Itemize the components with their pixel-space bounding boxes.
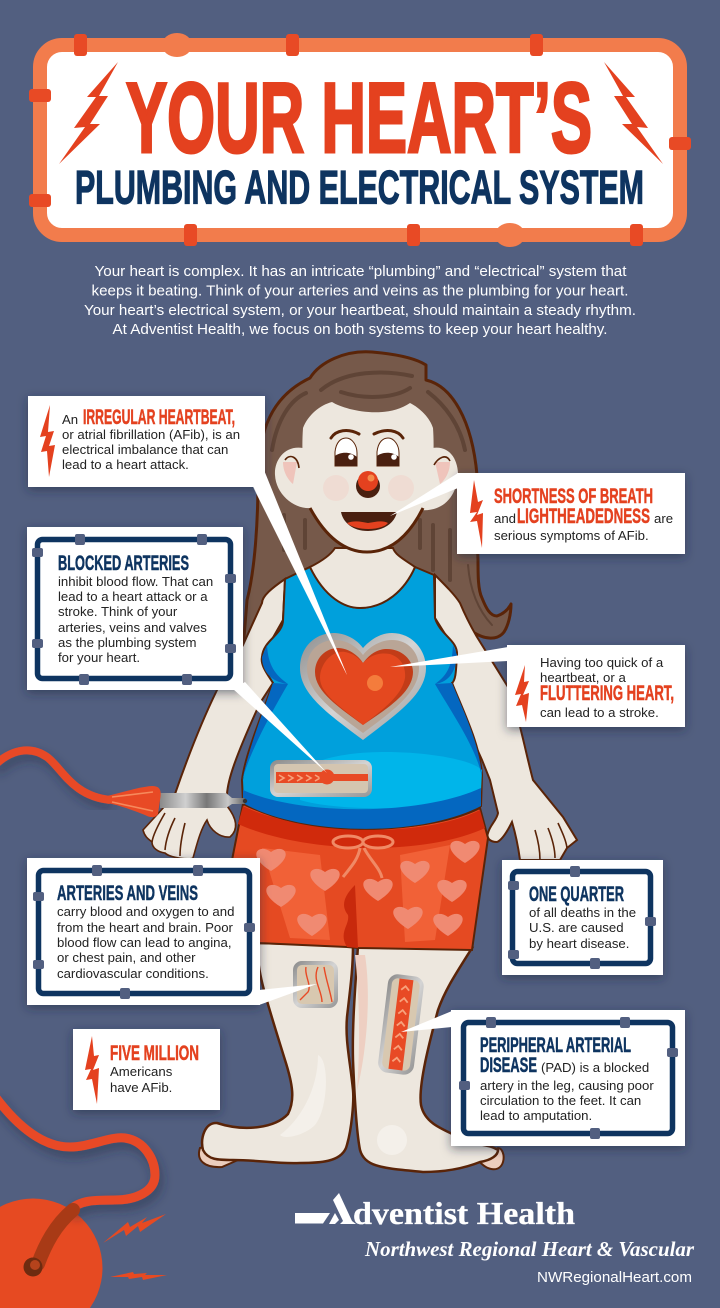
- text block: or atrial fibrillation (AFib), is an: [62, 427, 240, 442]
- panel: shortness of breath callout: [390, 473, 685, 554]
- text block: electrical imbalance that can: [62, 442, 228, 457]
- text block: IRREGULAR HEARTBEAT,: [83, 406, 235, 429]
- text block: are: [654, 511, 673, 526]
- drawstring bow: [333, 836, 393, 878]
- icon: bolt: [85, 1036, 99, 1104]
- icon: right lightning bolt: [604, 62, 663, 164]
- valves: [32, 534, 236, 685]
- face: [302, 402, 434, 552]
- text block: heartbeat, or a: [540, 670, 626, 685]
- text block: have AFib.: [110, 1080, 172, 1095]
- intro text: [84, 263, 636, 338]
- left arm and hand: [143, 579, 285, 859]
- figure: woman: [107, 352, 577, 1172]
- panel: five million callout: [73, 1029, 220, 1110]
- text block: BLOCKED ARTERIES: [58, 552, 189, 575]
- text block: PERIPHERAL ARTERIAL: [480, 1034, 631, 1057]
- hair: [243, 352, 511, 650]
- chest and neck: [310, 548, 415, 608]
- mouth: [341, 512, 397, 531]
- panel: fluttering heart callout: [390, 645, 685, 727]
- text block: DISEASE: [480, 1054, 537, 1077]
- text block: from the heart and brain. Poor: [57, 920, 234, 935]
- text block: [57, 882, 234, 981]
- text block: (PAD) is a blocked: [541, 1060, 649, 1075]
- text block: artery in the leg, causing poor: [480, 1078, 654, 1093]
- text block: Americans: [110, 1064, 173, 1079]
- shorts: [230, 804, 488, 950]
- panel: blocked arteries callout: [27, 527, 327, 773]
- text block: [110, 1042, 199, 1095]
- heart window: [300, 633, 426, 740]
- belly artery window: [272, 762, 370, 795]
- electric plug on wrist: [107, 786, 247, 817]
- footer text: NWRegionalHeart.com: [537, 1270, 692, 1286]
- icon: small bolts near socket: [103, 1214, 167, 1280]
- text block: stroke. Think of your: [58, 604, 178, 619]
- text block: cardiovascular conditions.: [57, 966, 209, 981]
- valves: [33, 865, 255, 999]
- hearts: [256, 841, 480, 936]
- text block: lead to a heart attack.: [62, 457, 189, 472]
- right arm and hand: [435, 575, 577, 860]
- text block: circulation to the feet. It can: [480, 1093, 641, 1108]
- icon: bolt: [470, 480, 483, 548]
- text block: FIVE MILLION: [110, 1042, 199, 1065]
- text block: for your heart.: [58, 650, 140, 665]
- icon: left lightning bolt: [59, 62, 118, 164]
- text block: ARTERIES AND VEINS: [57, 882, 198, 905]
- text block: blood flow can lead to angina,: [57, 935, 232, 950]
- text block: of all deaths in the: [529, 905, 636, 920]
- intro text: Your heart’s electrical system, or your heartbeat, should maintain a steady rhythm.: [84, 302, 636, 319]
- valves: [508, 866, 656, 969]
- text block: [480, 1034, 654, 1123]
- intro text: keeps it beating. Think of your arteries and veins as the plumbing for your heart.: [92, 282, 628, 300]
- text block: serious symptoms of AFib.: [494, 528, 649, 543]
- panel: peripheral arterial disease callout: [401, 1010, 685, 1146]
- ears: [275, 448, 458, 510]
- text block: can lead to a stroke.: [540, 705, 659, 720]
- clown nose: [356, 471, 380, 498]
- thigh window: [295, 963, 336, 1006]
- text block: arteries, veins and valves: [58, 620, 207, 635]
- text block: lead to amputation.: [480, 1108, 592, 1123]
- panel: one quarter callout: [502, 860, 663, 975]
- footer text: [364, 1237, 695, 1286]
- text block: ONE QUARTER: [529, 883, 624, 906]
- valves: [459, 1017, 678, 1139]
- text block: by heart disease.: [529, 936, 629, 951]
- lower electric cord and socket: [0, 1095, 155, 1308]
- icon: bolt: [515, 665, 529, 722]
- text block: lead to a heart attack or a: [58, 589, 208, 604]
- banner: pipe frame with title: [29, 33, 691, 247]
- text block: or chest pain, and other: [57, 950, 196, 965]
- panel: arteries and veins callout: [27, 858, 317, 1005]
- cheeks: [323, 475, 414, 501]
- text block: [494, 485, 673, 543]
- text block: LIGHTHEADEDNESS: [517, 505, 650, 528]
- text block: as the plumbing system: [58, 635, 197, 650]
- text block: inhibit blood flow. That can: [58, 574, 213, 589]
- intro text: At Adventist Health, we focus on both systems to keep your heart healthy.: [112, 321, 608, 338]
- legs and feet: [199, 943, 504, 1172]
- text block: [62, 406, 240, 472]
- text block: [529, 883, 636, 951]
- upper electric cord: [0, 750, 110, 800]
- eyebrows: [331, 431, 403, 438]
- panel: irregular heartbeat callout: [28, 396, 347, 675]
- text block: carry blood and oxygen to and: [57, 904, 234, 919]
- text block: An: [62, 412, 78, 427]
- logo: Adventist Health: dventist Health: [353, 1195, 575, 1231]
- text block: Having too quick of a: [540, 655, 664, 670]
- text block: [58, 552, 213, 665]
- footer text: Northwest Regional Heart & Vascular: [364, 1237, 695, 1261]
- tank top: [242, 567, 482, 829]
- text block: U.S. are caused: [529, 920, 624, 935]
- eyes: [335, 438, 399, 466]
- icon: bolt: [40, 405, 55, 477]
- text block: and: [494, 511, 516, 526]
- intro text: Your heart is complex. It has an intricate “plumbing” and “electrical” system that: [94, 263, 627, 280]
- text block: [540, 655, 674, 720]
- shin window: [379, 975, 423, 1074]
